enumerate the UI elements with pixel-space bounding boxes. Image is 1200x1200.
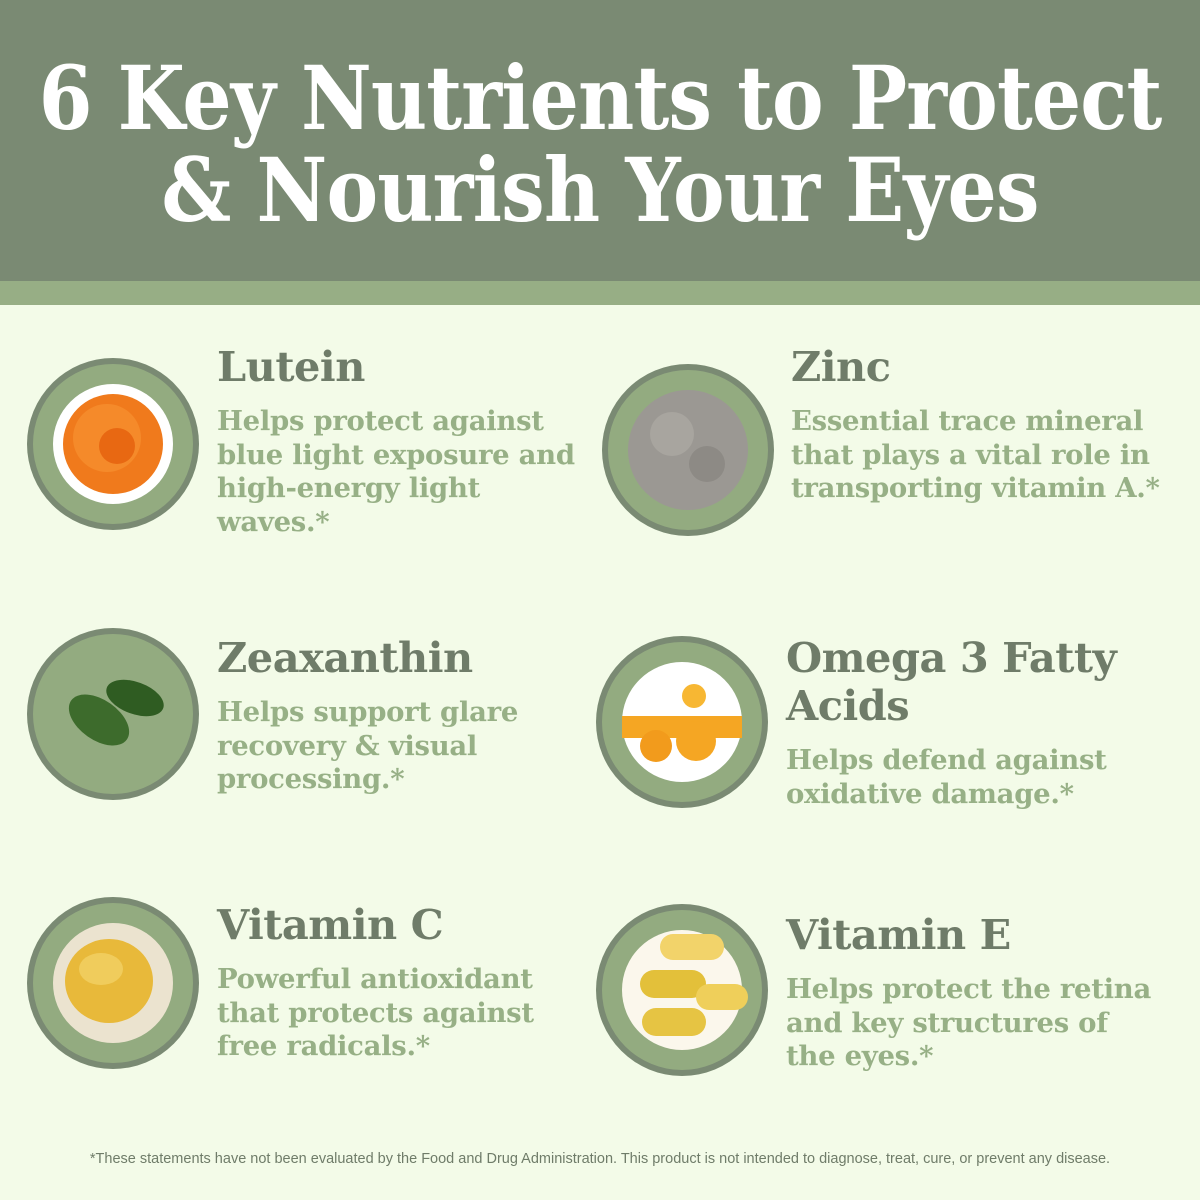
text: Zinc: [791, 342, 1160, 504]
text: Lutein: waves.*: [217, 506, 329, 538]
text: Omega 3: Acids: [786, 681, 909, 730]
footer disclaimer: *These statements have not been evaluated by the Food and Drug Administration. This product is not intended to diagnose, treat, cure, or prevent any disease.: [90, 1151, 1110, 1167]
text: Zinc: transporting vitamin A.*: [791, 472, 1160, 504]
text: Lutein: blue light exposure and: [217, 438, 575, 470]
text: Vitamin E: the eyes.*: [786, 1040, 933, 1072]
text: Vitamin C: free radicals.*: [217, 1030, 430, 1062]
text: Lutein: high-energy light: [217, 472, 480, 504]
icon: softgels (Vitamin E): [596, 904, 768, 1076]
text: Zinc: that plays a vital role in: [791, 438, 1150, 470]
text: Zinc: Essential trace mineral: [791, 405, 1143, 437]
header banner: [0, 0, 1200, 281]
text: Vitamin E: Helps protect the retina: [786, 973, 1151, 1005]
text: Omega 3: [786, 633, 1118, 810]
text: Lutein: Helps protect against: [217, 405, 544, 437]
text: Zeaxanthin: Zeaxanthin: [217, 633, 473, 682]
text: Lutein: [216, 342, 575, 538]
title: [39, 46, 1162, 242]
title: 6 Key Nutrients to Protect: [39, 46, 1161, 150]
text: Lutein: Lutein: [217, 342, 365, 391]
text: Zeaxanthin: [217, 633, 518, 795]
text: Omega 3: Helps defend against: [786, 744, 1107, 776]
text: Omega 3: oxidative damage.*: [786, 778, 1074, 810]
text: Vitamin E: and key structures of: [786, 1006, 1108, 1038]
icon: zinc powder: [602, 364, 774, 536]
text: Vitamin E: [786, 910, 1151, 1072]
text: Zeaxanthin: recovery & visual: [217, 730, 477, 762]
text: Zeaxanthin: Helps support glare: [217, 696, 518, 728]
text: Omega 3: Omega 3 Fatty: [786, 633, 1116, 682]
text: Vitamin C: [216, 900, 534, 1062]
icon: oil bubbles (Omega 3): [596, 636, 768, 808]
text: Zeaxanthin: processing.*: [217, 763, 404, 795]
text: Vitamin C: Vitamin C: [217, 900, 443, 949]
text: Vitamin C: Powerful antioxidant: [217, 963, 533, 995]
text: Zinc: Zinc: [791, 342, 891, 391]
icon: oil drop (Vitamin C): [27, 897, 199, 1069]
icon: spinach (Zeaxanthin): [27, 628, 199, 800]
text: Vitamin E: Vitamin E: [786, 910, 1011, 959]
title: & Nourish Your Eyes: [161, 138, 1039, 242]
icon: marigold (Lutein): [27, 358, 199, 530]
text: Vitamin C: that protects against: [217, 996, 534, 1028]
